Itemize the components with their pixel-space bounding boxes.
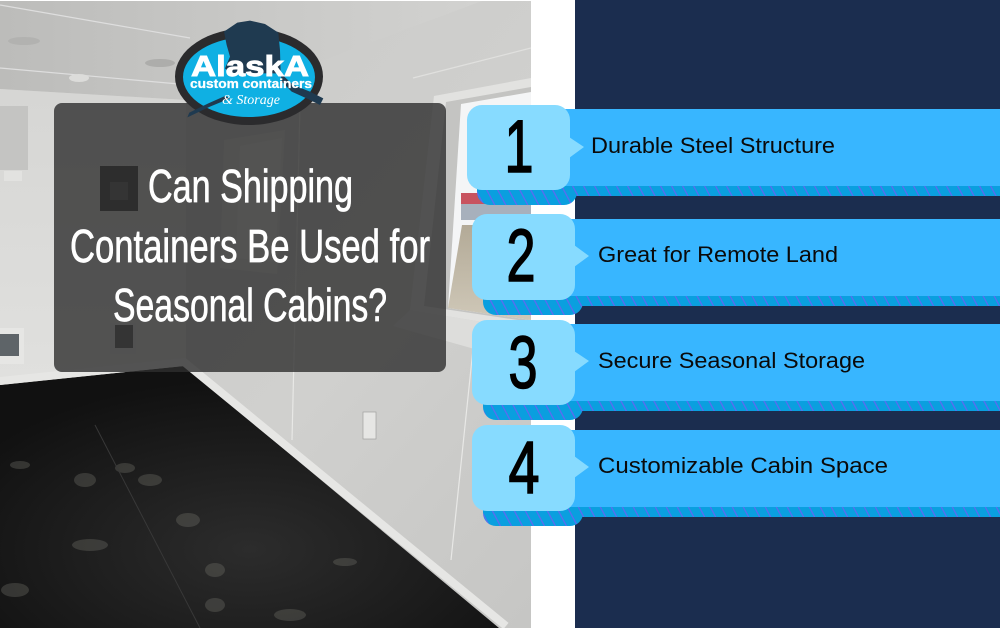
- logo: Alaska Custom Containers & Storage: [175, 21, 323, 125]
- label 2: Great for Remote Land: [598, 242, 838, 267]
- logo: custom containers line: custom containers: [190, 77, 312, 91]
- title overlay panel: [54, 103, 446, 372]
- right window: [433, 78, 531, 322]
- number 2: 2: [506, 214, 536, 297]
- title heading: Can Shipping: [148, 160, 353, 212]
- right window sill reveal: [446, 316, 480, 348]
- heaters: [0, 328, 24, 364]
- mid window: [220, 130, 285, 274]
- label 4: Customizable Cabin Space: [598, 453, 888, 478]
- list item 3: [472, 320, 1000, 420]
- title heading: Seasonal Cabins?: [113, 279, 387, 331]
- seams on right wall: [292, 372, 294, 440]
- label 3: Secure Seasonal Storage: [598, 348, 865, 373]
- list item 4: [472, 425, 1000, 526]
- floor: [0, 366, 499, 628]
- number 1: 1: [504, 105, 534, 188]
- navy right panel: [575, 0, 1000, 628]
- number 3: 3: [508, 321, 538, 404]
- label 1: Durable Steel Structure: [591, 133, 835, 158]
- title heading: [70, 160, 430, 331]
- photo: empty container cabin interior: [0, 1, 531, 628]
- list item 1: [467, 105, 1000, 205]
- floor scratches: [1, 461, 357, 621]
- wall panel, switch: [0, 106, 28, 170]
- logo: & Storage line: & Storage: [222, 93, 280, 108]
- title heading: Containers Be Used for: [70, 220, 430, 272]
- logo: AlaskA wordmark: AlaskA: [191, 51, 309, 83]
- breaker box: [100, 166, 138, 211]
- outlet: [363, 412, 376, 439]
- logo: Alaska state silhouette: [187, 21, 323, 117]
- number 4: 4: [508, 426, 540, 509]
- list item 2: [472, 214, 1000, 315]
